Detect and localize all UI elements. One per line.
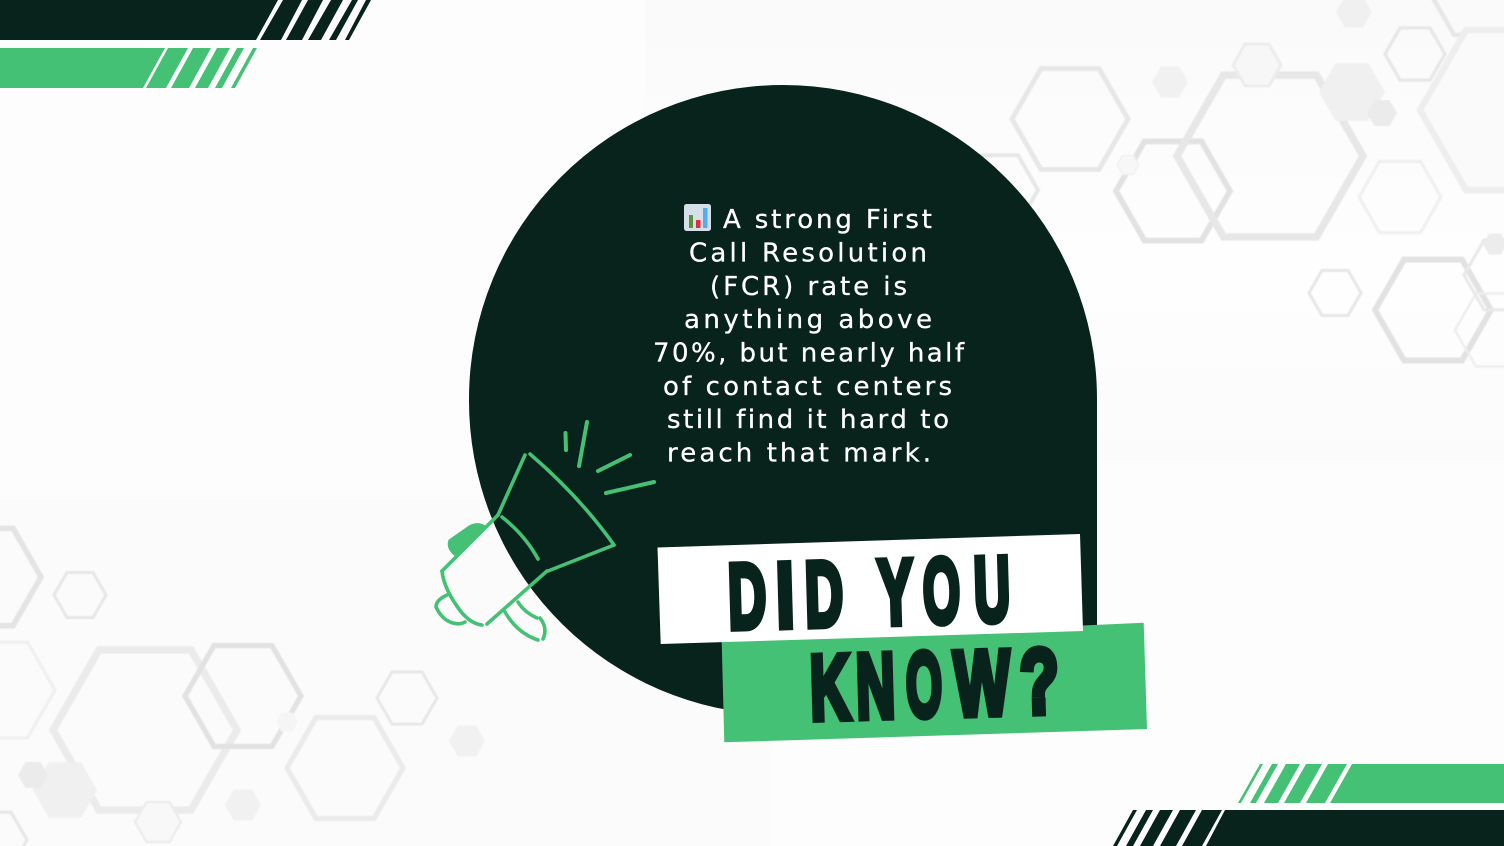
heading: DID YOU: Y <box>877 541 914 644</box>
top-left green striped bar <box>0 48 257 88</box>
hexagon pattern: bottom left <box>0 528 485 846</box>
body text: Call Resolution <box>689 238 927 268</box>
body text: 70%, but nearly half <box>653 338 965 368</box>
top-left dark striped bar <box>0 0 371 40</box>
body text: A strong First <box>723 205 932 235</box>
white banner <box>658 534 1083 644</box>
body text: anything above <box>684 305 932 335</box>
heading: KNOW?: K <box>809 636 851 739</box>
bottom-right dark striped bar <box>1113 810 1504 846</box>
body text <box>653 205 965 468</box>
heading: KNOW?: W <box>953 632 1012 735</box>
body text: (FCR) rate is <box>710 272 907 302</box>
body text: reach that mark. <box>667 438 931 468</box>
hexagon pattern: top right <box>958 0 1504 367</box>
green banner <box>722 623 1147 742</box>
heading: DID YOU: D <box>727 545 768 648</box>
heading: KNOW?: O <box>905 634 943 737</box>
dark rounded panel <box>469 85 1097 714</box>
icon: bar chart emoji <box>684 204 711 231</box>
heading: DID YOU: I <box>775 545 795 647</box>
heading: KNOW?: ? <box>1019 631 1060 734</box>
bottom-right green striped bar <box>1238 764 1504 803</box>
heading: DID YOU: D <box>804 543 844 646</box>
body text: of contact centers <box>663 372 952 402</box>
heading: DID YOU <box>727 539 1011 648</box>
heading: KNOW?: N <box>855 635 896 738</box>
heading: KNOW? <box>809 631 1060 739</box>
megaphone icon <box>436 422 654 640</box>
heading: DID YOU: O <box>922 540 961 643</box>
heading: DID YOU: U <box>973 539 1011 642</box>
body text: still find it hard to <box>667 405 949 435</box>
